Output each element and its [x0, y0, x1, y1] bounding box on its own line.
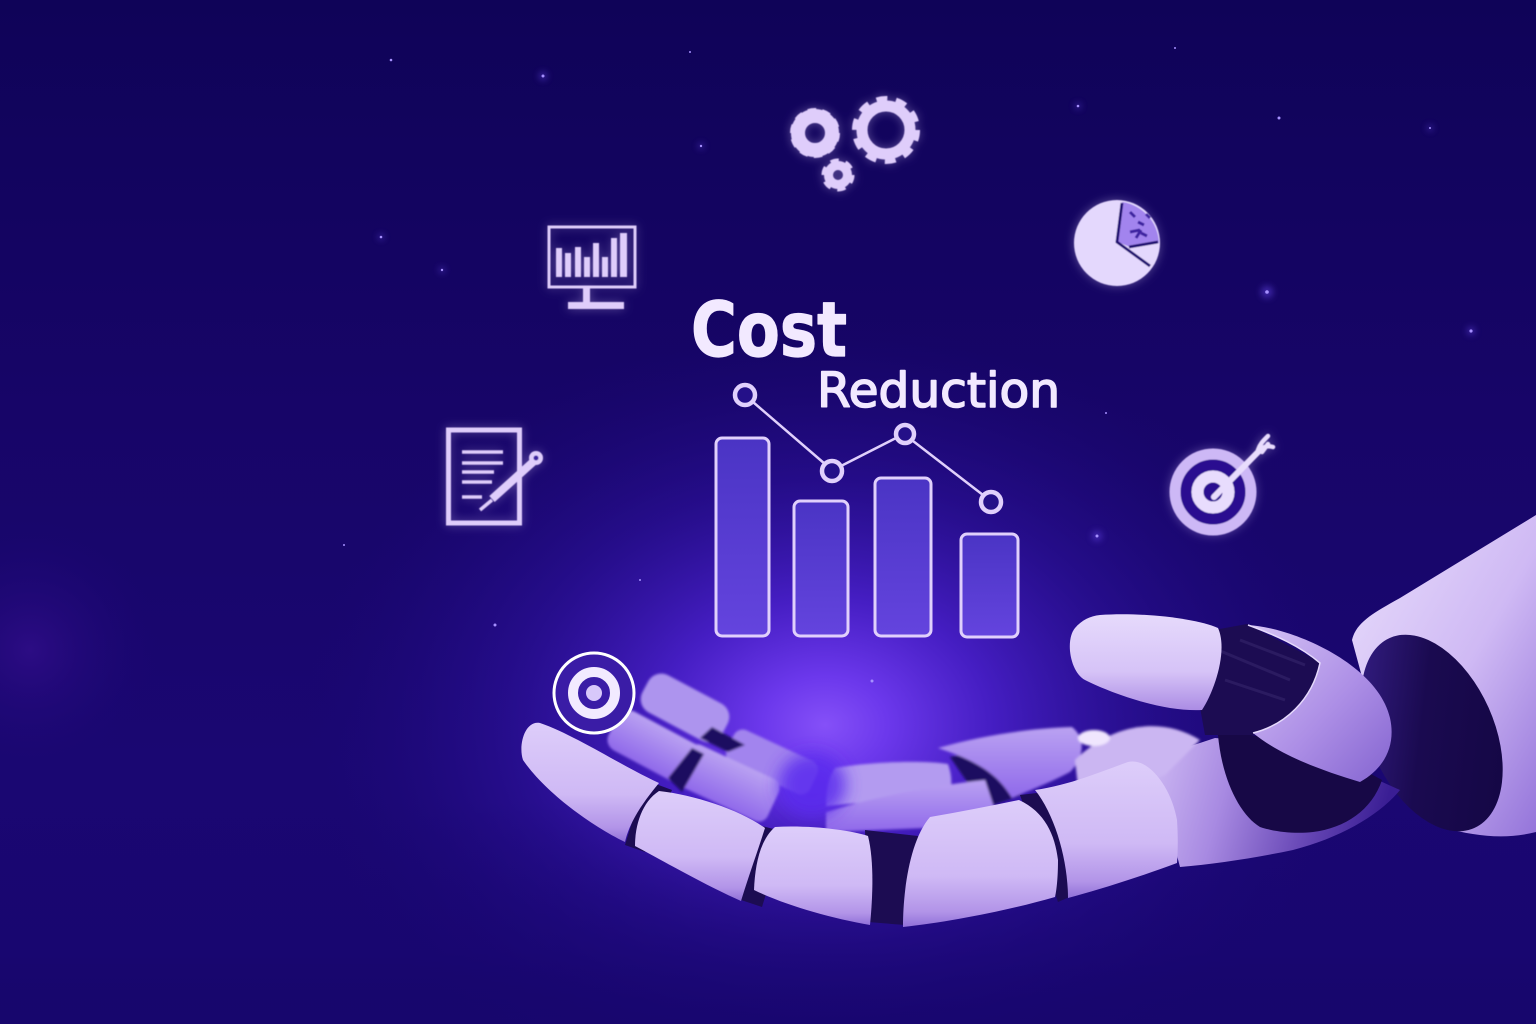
robot palm: [1150, 733, 1400, 867]
front finger: [521, 723, 1178, 927]
icon: monitor bar chart: [549, 227, 635, 309]
starfield: [343, 47, 1475, 682]
back fingers: [603, 668, 1200, 832]
robot arm: [1333, 515, 1536, 853]
icon: pie chart: [1074, 200, 1160, 286]
icon: small target on fingertip: [554, 653, 634, 733]
title: Cost Reduction: Reduction: [817, 363, 1060, 419]
central glow: [778, 753, 846, 817]
bar chart: [716, 438, 1018, 637]
icon: target with arrow: [1175, 436, 1273, 530]
title: Cost Reduction: Cost: [691, 285, 847, 374]
icon: gears: [793, 100, 916, 189]
line chart: [735, 385, 1001, 512]
thumb: [1070, 614, 1392, 782]
icon: document and pen: [448, 430, 543, 523]
title: Cost Reduction: [691, 285, 1060, 419]
